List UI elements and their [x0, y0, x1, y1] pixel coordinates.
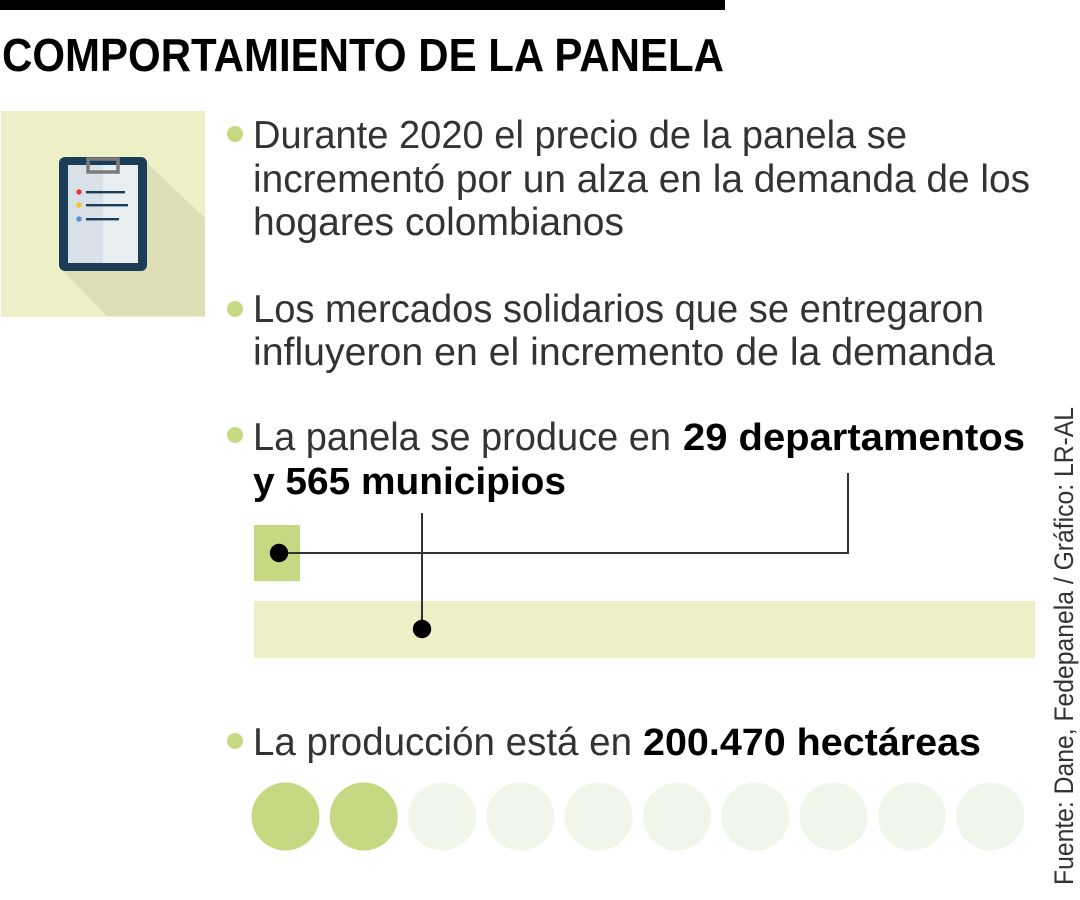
connector: departamentos — [270, 473, 848, 562]
bullet text: hectáreas — [227, 721, 981, 764]
bullet text: precio — [227, 114, 1030, 244]
bullet text: hectáreas: La producción está en — [253, 721, 632, 764]
bullet text: mercados — [227, 288, 995, 374]
icon: clipboard — [1, 111, 205, 317]
bar: municipios share — [254, 601, 1035, 658]
bullet text: departamentos y municipios: y 565 municipios — [253, 461, 566, 503]
bullet text: mercados: influyeron en el incremento de la demanda — [253, 331, 995, 374]
bar: departamentos share — [254, 525, 300, 581]
title: COMPORTAMIENTO DE LA PANELA — [2, 29, 724, 81]
bullet text: hectáreas: 200.470 hectáreas — [643, 722, 981, 764]
pictogram: ten circles, two highlighted — [252, 782, 1024, 850]
bullet text: mercados: Los mercados solidarios que se entregaron — [253, 288, 984, 331]
top rule — [0, 0, 725, 10]
bullet text: departamentos y municipios — [227, 416, 1025, 503]
bullet text: precio: incrementó por un alza en la demanda de los — [253, 158, 1030, 201]
source credit: Fuente: Dane, Fedepanela / Gráfico: LR-AL — [1049, 407, 1079, 885]
bullet text: precio: Durante 2020 el precio de la panela se — [253, 114, 907, 157]
bullet text: precio: hogares colombianos — [253, 201, 624, 244]
bullet text: departamentos y municipios: 29 departamentos — [683, 417, 1025, 459]
connector: municipios — [413, 513, 431, 638]
bullet text: departamentos y municipios: La panela se produce en — [253, 416, 671, 459]
